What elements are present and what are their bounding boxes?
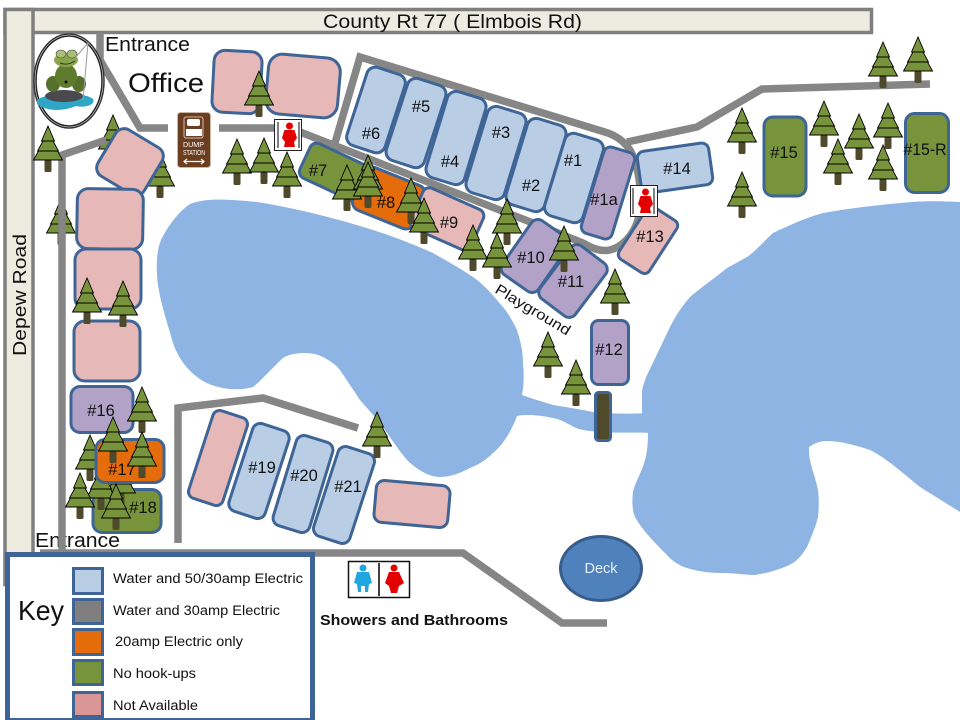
sign: dump station: DUMP (183, 142, 204, 149)
site 1a: #1a (590, 191, 619, 209)
deck: Deck (584, 561, 618, 577)
site 17 (96, 440, 164, 482)
road name: County Rt 77: County Rt 77 ( Elmbois Rd) (323, 12, 582, 33)
label: playground: Playground (492, 282, 573, 339)
county road bar (5, 10, 872, 33)
site 13: #13 (636, 228, 664, 246)
site 1a (580, 145, 636, 241)
site 20: #20 (290, 467, 318, 485)
site 17: #17 (108, 461, 136, 479)
icon: restroom by site 13 (630, 186, 658, 216)
site 10: #10 (517, 249, 545, 267)
label: entrance north: Entrance (105, 34, 190, 56)
trees behind sites (46, 115, 174, 245)
site: office left (211, 50, 263, 114)
logo: frog on lily pad (34, 34, 104, 128)
site 18 (93, 490, 161, 532)
site 4 (424, 89, 488, 187)
site 16 (71, 386, 133, 432)
site 15: #15 (770, 144, 798, 162)
site: unavailable row 1 (76, 188, 144, 250)
label: showers and bathrooms: Showers and Bathrooms (320, 612, 508, 629)
site: unavailable lower row (187, 409, 249, 507)
key item: water and 30amp: Water and 30amp Electric (113, 603, 280, 618)
site 20 (271, 433, 335, 535)
key item: not available (74, 692, 198, 716)
trees behind site 17 (76, 435, 136, 510)
site: unavailable row 2 (75, 249, 141, 309)
road name: Depew Road: Depew Road (10, 234, 30, 356)
site 18: #18 (129, 499, 157, 517)
site 6: #6 (362, 125, 380, 143)
site 1 (542, 131, 606, 225)
key panel (8, 554, 312, 720)
key heading: Key (18, 595, 64, 626)
label: entrance south: Entrance (35, 530, 120, 552)
site 2 (504, 116, 568, 214)
site 13 (616, 204, 680, 276)
site 3 (464, 104, 528, 202)
key item: water and 50/30amp: Water and 50/30amp Electric (113, 571, 303, 586)
key item: no hook-ups (74, 660, 196, 684)
site: office right (265, 53, 341, 119)
site 14 (636, 142, 714, 194)
key item: water and 50/30amp (74, 568, 303, 594)
site 8: #8 (377, 194, 395, 212)
site 21 (311, 444, 377, 546)
site 14: #14 (663, 160, 691, 178)
key item: not available: Not Available (113, 698, 198, 713)
site 2: #2 (522, 177, 540, 195)
site 21: #21 (334, 478, 362, 496)
icon: restroom by dump station (274, 120, 302, 150)
icon: showers and bathrooms (348, 562, 410, 598)
site: unavailable near lake (373, 480, 451, 528)
site 12: #12 (595, 341, 623, 359)
site 12 (592, 320, 628, 384)
site: rotated unavailable (93, 125, 167, 199)
Depew road bar (5, 10, 33, 584)
site 19: #19 (248, 459, 276, 477)
sign: dump station (178, 112, 210, 168)
key item: no hook-ups: No hook-ups (113, 666, 196, 681)
bridge (596, 392, 610, 440)
site 11 (536, 241, 610, 321)
site 15-R: #15-R (904, 141, 947, 159)
site 5 (384, 76, 448, 170)
site 6 (344, 65, 408, 155)
site 7 (297, 141, 373, 203)
road network (40, 33, 930, 623)
forest trees (34, 37, 932, 530)
site 11: #11 (558, 273, 584, 291)
deck (560, 536, 642, 600)
site 10 (498, 216, 572, 296)
site 8 (350, 164, 428, 232)
label: office: Office (128, 68, 204, 98)
site 1: #1 (564, 152, 582, 170)
site 9: #9 (440, 214, 458, 232)
site: unavailable row 3 (74, 321, 140, 381)
site 15-R (904, 114, 948, 192)
key item: water and 30amp (74, 600, 280, 624)
site 4: #4 (441, 153, 459, 171)
site 16: #16 (87, 402, 115, 420)
left lake (157, 200, 650, 477)
site 9 (408, 185, 486, 253)
site 3: #3 (492, 124, 510, 142)
site 5: #5 (412, 98, 430, 116)
right lake (632, 201, 960, 575)
key item: 20amp (74, 630, 243, 654)
sign: dump station: STATION (183, 150, 205, 157)
site 19 (227, 421, 291, 521)
site 7: #7 (309, 162, 327, 180)
site 15 (764, 117, 806, 196)
key item: 20amp: 20amp Electric only (115, 634, 243, 649)
